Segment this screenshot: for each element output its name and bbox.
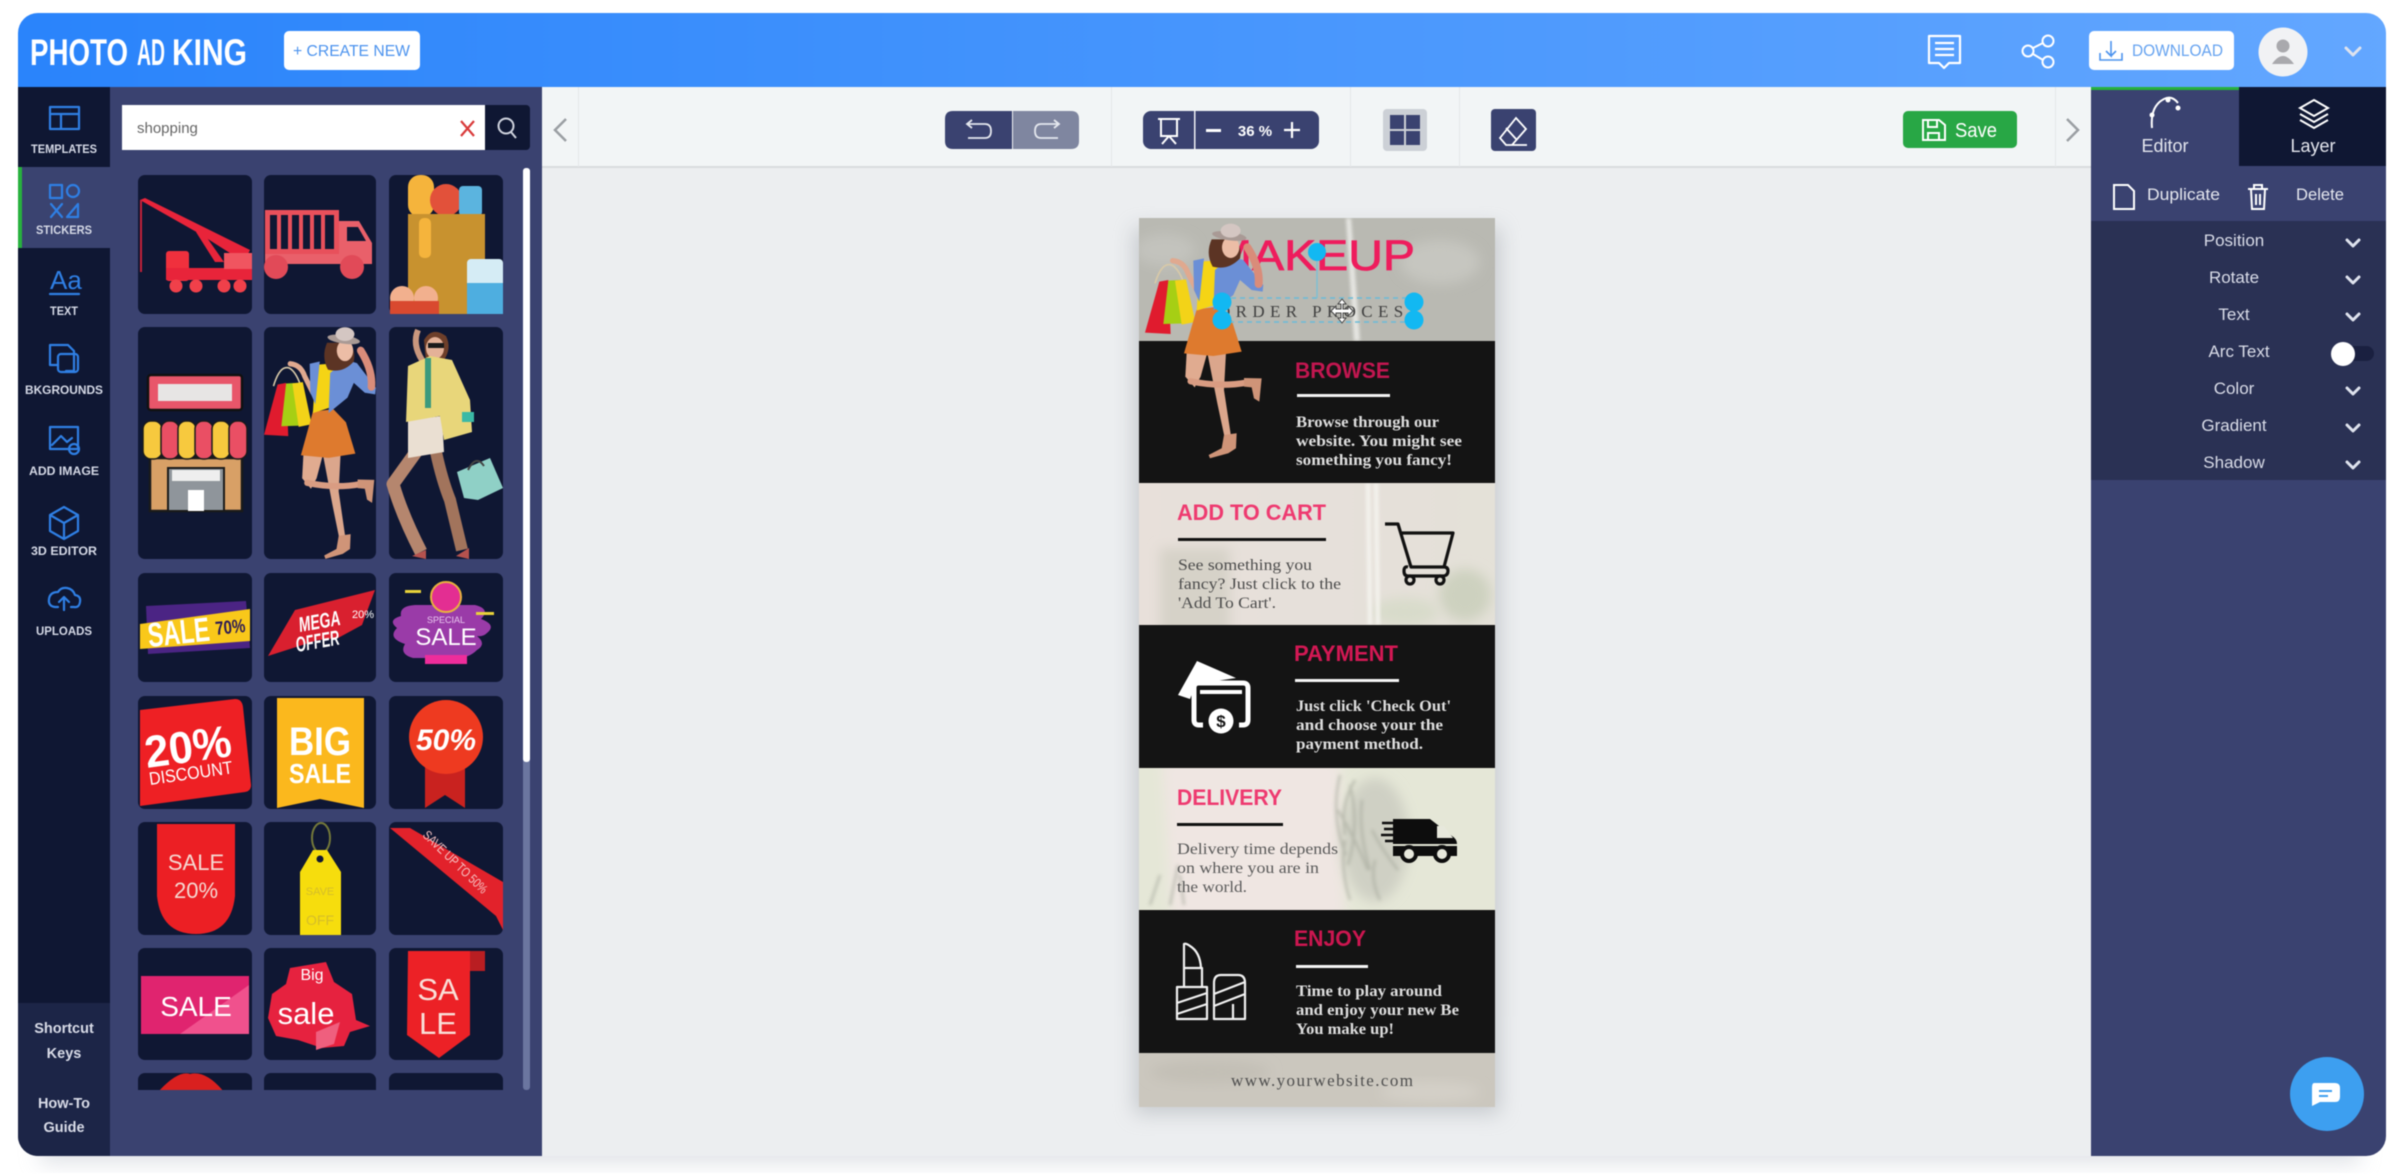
- step: add to cart: ADD TO CART: [1177, 500, 1327, 525]
- step: enjoy: and enjoy your new Be: [1296, 1002, 1459, 1019]
- option: gradient: Gradient: [2201, 416, 2267, 435]
- sticker: sale upto 70: [138, 573, 252, 682]
- selected woman sticker on poster: [1145, 224, 1263, 458]
- poster shadow: [1134, 228, 1500, 1114]
- right properties panel: [2091, 87, 2387, 1156]
- sticker: special sale: SPECIAL: [427, 615, 465, 625]
- sticker: corner ribbon: [389, 822, 503, 935]
- sticker: special sale: SALE: [415, 624, 477, 651]
- sticker: mega offer: OFFER: [294, 627, 342, 657]
- nav: uploads: UPLOADS: [36, 624, 92, 638]
- presentation and zoom control: 36 %: [1238, 123, 1272, 140]
- logo: KING: [172, 32, 247, 73]
- sticker: crane: [138, 175, 252, 314]
- poster subtitle: ORDER PROCESS: [1218, 302, 1418, 321]
- accordion list: [2091, 221, 2387, 480]
- sticker: yellow price tag: [264, 822, 376, 935]
- option: color: [2214, 379, 2359, 398]
- create new button: [284, 31, 420, 70]
- poster header background: [1135, 218, 1495, 341]
- sticker: 20 percent discount: 20%: [141, 715, 235, 778]
- sticker: truck: [264, 175, 376, 314]
- sticker: 50 percent rosette: 50%: [416, 724, 476, 757]
- option: gradient: [2201, 416, 2359, 435]
- step: add to cart: 'Add To Cart'.: [1178, 595, 1276, 612]
- step: delivery: DELIVERY: [1177, 785, 1282, 810]
- step: enjoy: Time to play around: [1296, 983, 1442, 1000]
- option: arc text toggle: [2208, 342, 2374, 366]
- nav: stickers: [36, 185, 92, 237]
- stickers panel: [110, 87, 542, 1156]
- logo: [31, 38, 246, 66]
- sticker: special sale: [389, 573, 503, 682]
- sticker: grocery bag: [389, 175, 503, 314]
- option: position: Position: [2204, 231, 2264, 250]
- sticker grid: [138, 175, 503, 1113]
- option: text: [2218, 305, 2359, 324]
- sticker: big sale splash: [264, 948, 376, 1060]
- sticker: yellow price tag: SAVE: [306, 886, 334, 898]
- option: rotate: [2209, 268, 2359, 287]
- download button: [2089, 31, 2234, 70]
- icon: lipstick and compact: [1177, 944, 1245, 1019]
- poster footer: www.yourwebsite.com: [1231, 1071, 1413, 1090]
- nav: stickers: STICKERS: [36, 223, 92, 237]
- step: enjoy: You make up!: [1296, 1021, 1394, 1038]
- sticker: yellow price tag: OFF: [306, 912, 334, 928]
- option: color: Color: [2214, 379, 2255, 398]
- sticker: shop front: [138, 327, 252, 559]
- save button: [1903, 111, 2017, 148]
- sticker: big sale: SALE: [289, 758, 351, 789]
- help: how-to guide: [38, 1096, 90, 1136]
- step: payment: PAYMENT: [1294, 641, 1399, 666]
- nav: uploads: [36, 588, 92, 638]
- search box: [122, 105, 530, 150]
- icon: collapse right arrow: [2067, 119, 2078, 141]
- logo: AD: [137, 32, 165, 73]
- icon: move cursor: [1331, 299, 1353, 323]
- chat support button: [2290, 1057, 2364, 1131]
- step: browse: website. You might see: [1296, 433, 1462, 450]
- nav: backgrounds: [25, 345, 103, 397]
- presentation and zoom control: [1143, 111, 1319, 149]
- sticker: big sale splash: sale: [278, 996, 334, 1031]
- action: delete: Delete: [2296, 185, 2344, 204]
- step: delivery: Delivery time depends: [1177, 841, 1338, 858]
- nav: templates: TEMPLATES: [31, 142, 97, 156]
- action: duplicate: [2114, 185, 2220, 209]
- icon: shopping cart: [1385, 524, 1453, 584]
- sticker: pink sale: [138, 948, 252, 1060]
- sticker: sale 20 percent pennant: SALE: [168, 850, 224, 875]
- help: shortcut keys: Keys: [47, 1046, 81, 1062]
- download button: DOWNLOAD: [2132, 41, 2223, 60]
- help: shortcut keys: [34, 1021, 94, 1062]
- sticker: 50 percent rosette: [389, 696, 503, 809]
- scrollbar: [523, 168, 530, 1090]
- sticker: 20 percent discount: [138, 696, 252, 809]
- avatar: [2258, 28, 2308, 76]
- step: enjoy: [1139, 910, 1495, 1053]
- step: browse: BROWSE: [1295, 358, 1390, 383]
- sticker row clipped at list bottom: [138, 1073, 503, 1113]
- sticker: sale upto 70: 70%: [214, 616, 246, 640]
- step: delivery: the world.: [1177, 879, 1247, 896]
- step: payment: and choose your the: [1296, 717, 1443, 734]
- nav: add image: [29, 427, 99, 478]
- sticker: sale 20 percent pennant: [138, 822, 252, 935]
- sticker: sale ribbon: SA: [417, 972, 459, 1007]
- step: browse: Browse through our: [1296, 414, 1439, 431]
- step: delivery: [1139, 760, 1495, 920]
- sticker: mega offer: MEGA: [297, 607, 342, 637]
- option: arc text toggle: Arc Text: [2208, 342, 2270, 361]
- step: browse: [1139, 341, 1495, 483]
- action: delete: [2248, 185, 2344, 209]
- icon: cards and dollar: $: [1216, 712, 1226, 731]
- active item: stickers: [18, 167, 110, 248]
- nav: backgrounds: BKGROUNDS: [25, 383, 103, 397]
- nav: text: Aa: [50, 265, 82, 295]
- sticker: big sale splash: Big: [300, 967, 324, 984]
- step: add to cart: [1139, 483, 1495, 638]
- icon: collapse left arrow: [555, 119, 566, 141]
- poster title: MAKEUP: [1212, 232, 1415, 280]
- poster: makeup order process: [1135, 218, 1495, 1107]
- sticker: pink sale: SALE: [160, 991, 232, 1022]
- sticker: woman in yellow blazer: [389, 327, 503, 559]
- tab: layer: Layer: [2290, 136, 2336, 156]
- create new button: + CREATE NEW: [293, 43, 411, 60]
- step: delivery: on where you are in: [1177, 860, 1319, 877]
- save button: Save: [1955, 120, 1997, 142]
- icon: feedback message: [1929, 36, 1960, 68]
- sticker: corner ribbon: SAVE UP TO 50%: [420, 827, 491, 897]
- sticker: sale ribbon: [389, 948, 503, 1060]
- step: payment: Just click 'Check Out': [1296, 698, 1451, 715]
- icon: cards and dollar: [1178, 661, 1248, 734]
- sticker: sale upto 70: SALE: [146, 611, 211, 655]
- icon: account chevron: [2346, 48, 2360, 55]
- sticker: sale ribbon: LE: [419, 1006, 457, 1041]
- sticker: big sale: [264, 696, 376, 809]
- sticker: big sale: BIG: [289, 720, 351, 764]
- step: enjoy: ENJOY: [1294, 926, 1366, 951]
- sticker: sale 20 percent pennant: 20%: [174, 878, 218, 903]
- tab: editor: [2091, 87, 2239, 156]
- grid toggle button: [1383, 109, 1427, 151]
- tab: layer: [2239, 87, 2387, 166]
- help: shortcut keys: Shortcut: [34, 1021, 94, 1037]
- window shadow: [40, 1120, 2360, 1164]
- editing toolbar: [542, 87, 2091, 168]
- nav: 3d editor: [31, 507, 97, 558]
- search box: shopping: [137, 120, 198, 137]
- help: how-to guide: How-To: [38, 1096, 90, 1112]
- sticker: mega offer: [264, 573, 376, 682]
- tab: editor: Editor: [2141, 136, 2189, 156]
- step: payment: payment method.: [1296, 736, 1423, 753]
- step: browse: something you fancy!: [1296, 452, 1452, 469]
- logo: PHOTO: [30, 32, 128, 73]
- poster footer: [1139, 1053, 1495, 1107]
- option: shadow: Shadow: [2203, 453, 2265, 472]
- sticker: 20 percent discount: DISCOUNT: [148, 757, 234, 789]
- nav: text: TEXT: [50, 304, 79, 318]
- sticker: mega offer: 20%: [352, 609, 374, 621]
- icon: fast delivery van: [1381, 819, 1457, 861]
- option: shadow: [2203, 453, 2359, 472]
- option: position: [2204, 231, 2359, 250]
- nav: 3d editor: 3D EDITOR: [31, 544, 97, 558]
- sticker: woman with shopping bags: [264, 327, 376, 559]
- nav: templates: [31, 107, 97, 156]
- help: how-to guide: Guide: [43, 1120, 85, 1136]
- step: add to cart: See something you: [1178, 557, 1312, 574]
- help links background: [18, 1003, 110, 1156]
- nav: add image: ADD IMAGE: [29, 464, 99, 478]
- selection handles: [1212, 243, 1424, 330]
- icon: share: [2022, 36, 2054, 68]
- left navigation rail: [18, 87, 110, 1156]
- action: duplicate: Duplicate: [2147, 185, 2220, 204]
- nav: text: [50, 265, 82, 318]
- option: rotate: Rotate: [2209, 268, 2259, 287]
- option: text: Text: [2218, 305, 2250, 324]
- top navigation bar: [18, 13, 2386, 87]
- eraser button: [1491, 109, 1536, 151]
- step: payment: [1139, 625, 1495, 768]
- undo and redo buttons: [945, 111, 1079, 149]
- step: add to cart: fancy? Just click to the: [1178, 576, 1341, 593]
